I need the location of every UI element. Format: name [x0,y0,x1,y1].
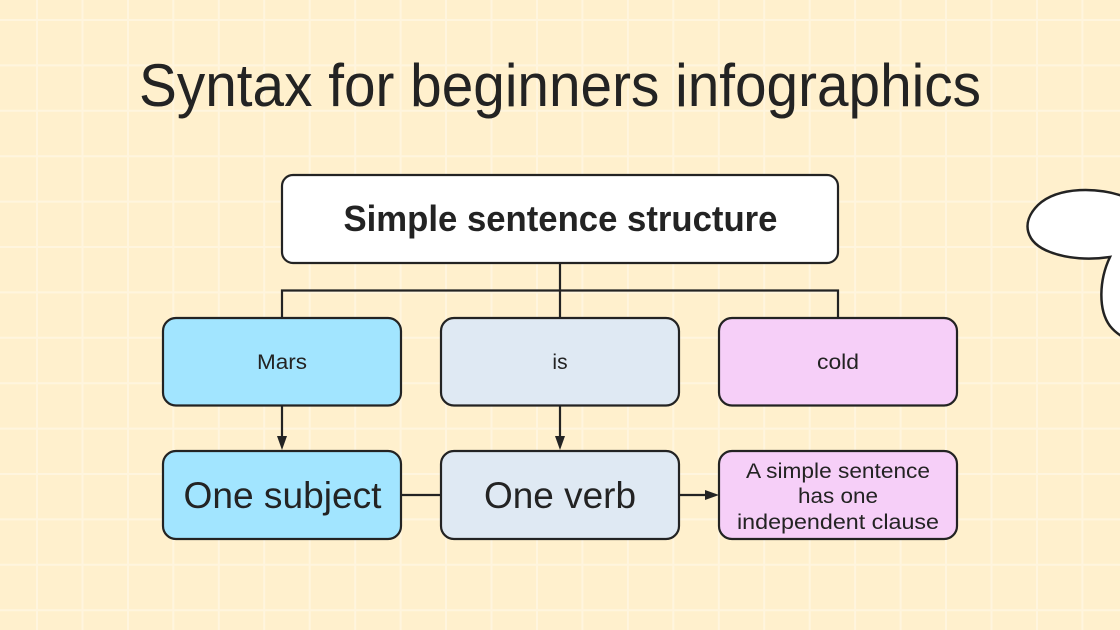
box: One verb [441,451,679,539]
box: clause definition: A simple sentence [746,460,930,483]
box: One verb: One verb [484,475,636,516]
arrow: Mars to One subject [277,405,287,450]
header box: Simple sentence structure [282,175,838,263]
box: Mars: Mars [257,351,307,374]
speech bubble [1028,190,1120,338]
box: clause definition: has one [798,485,878,508]
header box: Simple sentence structure: Simple sentence structure [344,198,778,239]
box: Mars [163,318,401,406]
box: is: is [552,351,568,374]
arrow: is to One verb [555,405,565,450]
connector: One subject to One verb [401,494,441,496]
connector: header to top row [282,263,838,318]
box: cold [719,318,957,406]
arrow: One verb to clause box [679,490,719,500]
box: One subject: One subject [184,475,382,516]
box: is [441,318,679,406]
box: cold: cold [817,351,859,374]
box: One subject [163,451,401,539]
box: clause definition: independent clause [737,511,939,534]
title: Syntax for beginners infographics [139,52,981,119]
box: clause definition [719,451,957,539]
